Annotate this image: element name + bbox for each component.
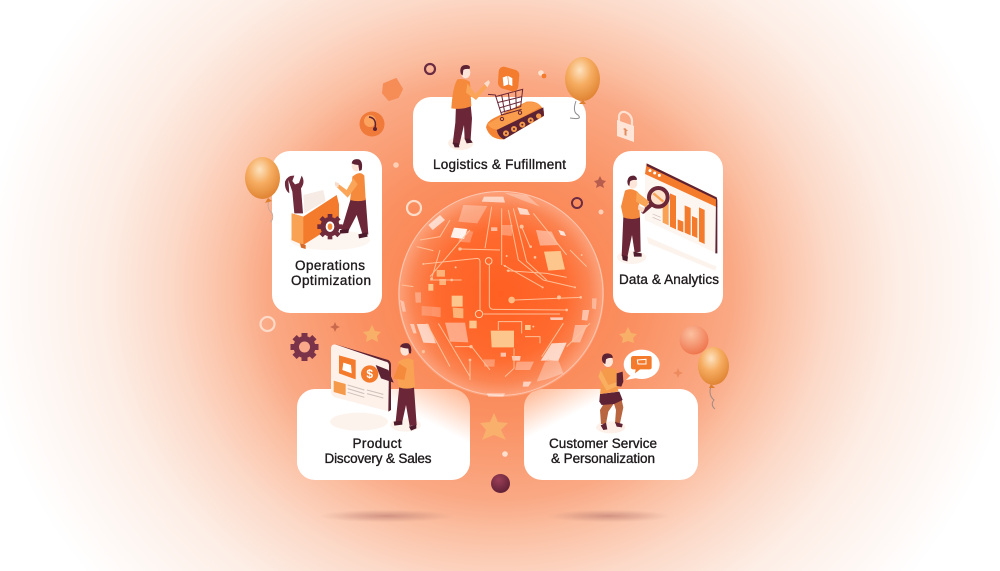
- icon: ring plum: [425, 64, 435, 74]
- globe: [398, 191, 604, 397]
- circuit lines: [402, 207, 590, 380]
- ground shadows: [319, 510, 670, 522]
- dashboard window: [645, 163, 717, 253]
- person: [621, 176, 649, 261]
- icon: ring plum 2: [572, 198, 582, 208]
- card: logistics: [413, 97, 586, 182]
- heading: product: Product: [352, 436, 402, 451]
- product illustration: [330, 343, 421, 432]
- data illustration: [617, 163, 717, 271]
- papers: [303, 190, 326, 213]
- stars: [330, 176, 683, 440]
- icon: padlock: [617, 112, 634, 142]
- balloon: right gold: [698, 347, 729, 409]
- icon: ring light: [407, 201, 421, 215]
- heading: operations: Optimization: [291, 273, 371, 288]
- balloon: right pink: [680, 326, 708, 354]
- dots: [393, 70, 604, 457]
- heading: customer: Customer Service: [549, 436, 657, 451]
- plum ball: [491, 474, 510, 493]
- shopping cart: [488, 89, 523, 121]
- person: [598, 353, 623, 430]
- person: [451, 65, 490, 147]
- heading: operations: [291, 258, 371, 288]
- icon: hearing badge: [360, 112, 384, 136]
- heading: customer: [549, 436, 657, 466]
- card: customer: [524, 389, 698, 480]
- gear: [317, 214, 343, 239]
- sales panel: $: [366, 367, 373, 381]
- card: operations: [272, 151, 382, 313]
- heading: logistics: Logistics & Fufillment: [433, 157, 566, 172]
- card: data: [613, 151, 723, 313]
- speech bubble: [624, 350, 660, 380]
- heading: data: Data & Analytics: [619, 272, 719, 287]
- magnifier: [643, 188, 668, 212]
- wrench: [285, 176, 304, 213]
- heading: operations: Operations: [295, 258, 365, 273]
- icon: pentagon: [383, 79, 402, 100]
- balloon: left: [245, 157, 280, 222]
- card: product: [297, 389, 470, 480]
- icon: plum gear: [290, 333, 318, 361]
- operations illustration: [285, 159, 370, 250]
- balloon: top: [565, 57, 600, 119]
- logistics illustration: [448, 65, 544, 150]
- bars: [670, 193, 705, 244]
- heading: customer: & Personalization: [551, 451, 655, 466]
- icon: ring lower left: [260, 317, 274, 331]
- person: [376, 343, 417, 431]
- conveyor: [486, 101, 544, 139]
- globe panels: [400, 193, 597, 397]
- heading: product: [324, 436, 432, 466]
- person: [335, 159, 368, 238]
- product box icon: [498, 67, 519, 92]
- heading: product: Discovery & Sales: [324, 451, 432, 466]
- customer illustration: [596, 350, 660, 433]
- toolbox: [292, 195, 339, 245]
